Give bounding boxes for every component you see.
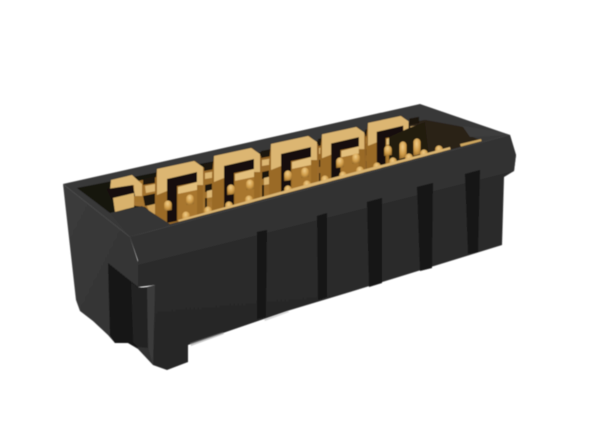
right cavity shading bbox=[400, 120, 482, 163]
dark area right of contacts bbox=[388, 122, 428, 162]
upper chamfer band bbox=[130, 135, 516, 265]
slot 2 bbox=[317, 213, 327, 300]
front face of housing bbox=[130, 135, 516, 370]
left end face of housing bbox=[63, 184, 160, 365]
slot 4 bbox=[417, 183, 433, 271]
illustration: black connector housing with gold contacts bbox=[62, 103, 517, 371]
left rim block bbox=[110, 206, 172, 237]
pale front contact strip bbox=[178, 147, 451, 224]
contact pins bbox=[164, 138, 443, 222]
right rim block bbox=[457, 125, 510, 137]
slot 1 bbox=[257, 230, 267, 319]
underside glints bbox=[190, 332, 224, 346]
connector cavity bbox=[77, 120, 482, 224]
top rim of housing bbox=[63, 104, 510, 237]
end notch recess bbox=[108, 263, 138, 348]
gold contact field bbox=[107, 115, 482, 225]
contact hooks row bbox=[154, 160, 214, 224]
slot 5 bbox=[465, 170, 480, 254]
leftmost contact hook bbox=[110, 175, 142, 196]
slot 3 bbox=[367, 198, 382, 287]
